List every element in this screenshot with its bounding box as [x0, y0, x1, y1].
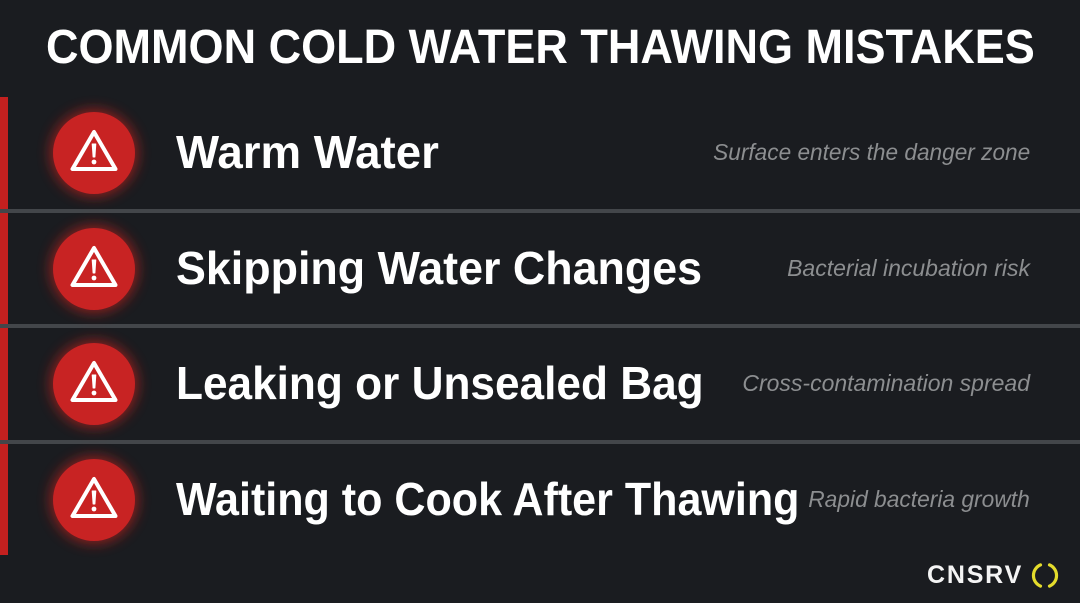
row: skipping water changes	[42, 216, 1031, 322]
label: Leaking or Unsealed Bag	[176, 357, 704, 409]
label: Waiting to Cook After Thawing	[176, 473, 799, 525]
row: leaking bag	[42, 332, 1031, 436]
red accent bar	[0, 97, 8, 555]
description: Surface enters the danger zone	[713, 139, 1030, 165]
logo icon	[1032, 563, 1058, 588]
row: waiting to cook	[42, 448, 1030, 552]
description: Rapid bacteria growth	[809, 486, 1030, 512]
logo wordmark: CNSRV	[927, 561, 1023, 589]
icon: warning	[42, 448, 146, 552]
icon: warning	[42, 100, 146, 206]
label: Warm Water	[176, 126, 439, 178]
icon: warning	[42, 332, 146, 436]
label: Skipping Water Changes	[176, 242, 702, 294]
description: Bacterial incubation risk	[787, 255, 1030, 281]
row: warm water	[42, 100, 1030, 206]
title: COMMON COLD WATER THAWING MISTAKES	[46, 21, 1035, 74]
icon: warning	[42, 216, 146, 322]
description: Cross-contamination spread	[742, 370, 1030, 396]
